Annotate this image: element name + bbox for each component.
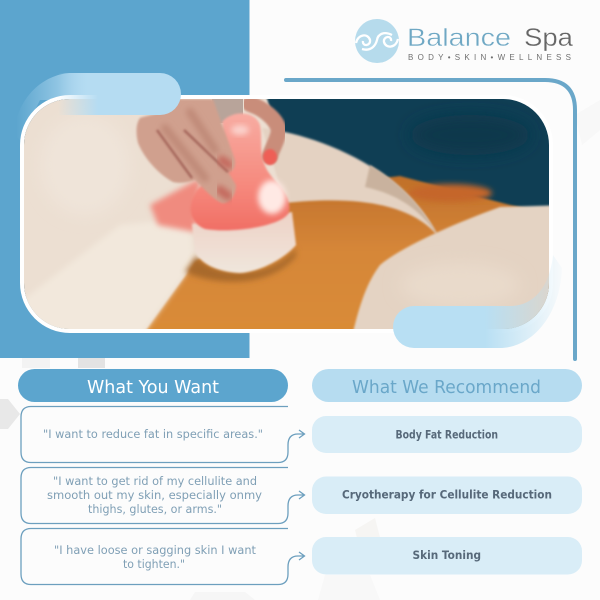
left header: What You Want: What You Want [87,377,219,398]
bottom light blue accent pill [393,255,562,348]
recommendation: Skin Toning: Skin Toning [412,549,481,562]
logo [355,19,573,63]
right towel [352,204,549,329]
request 3 text [54,544,257,571]
belly [145,174,549,329]
request 2 text: thighs, glutes, or arms." [88,503,222,516]
request box 1 with arrow [21,406,304,462]
request 1 text: "I want to reduce fat in specific areas." [43,428,263,441]
hand: fingers mass [137,99,236,203]
request 2 text: "I want to get rid of my cellulite and [53,475,257,488]
left header: What You Want [18,369,288,402]
right header: What We Recommend: What We Recommend [352,377,541,398]
logo wordmark: Balance: Balance [407,24,511,52]
red glow on towel [150,178,200,232]
right frame line [286,80,575,359]
device highlight [258,180,286,214]
device shadow [185,248,296,282]
request box 3 with arrow [21,528,304,584]
recommendation: Skin Toning [312,537,582,574]
logo wordmark: Spa: Spa [524,24,573,52]
photo: body treatment device [24,99,549,329]
hand: finger separators [157,130,228,178]
device white base [192,212,296,273]
recommendation: Cryotherapy for Cellulite Reduction: Cryotherapy for Cellulite Reduction [342,488,552,502]
blue backdrop panel [0,0,250,358]
device metal neck [212,99,243,123]
top light blue accent pill [58,73,181,115]
logo icon: swirl circle [355,19,399,63]
recommendation: Body Fat Reduction [312,416,582,453]
hand: finger shading [165,112,215,178]
request 2 text: smooth out my skin, especially onmy [47,489,262,502]
hand: thumb [250,104,279,156]
recommendation: Cryotherapy for Cellulite Reduction [312,476,582,514]
logo tagline: BODY•SKIN•WELLNESS [408,53,571,62]
device glowing head [191,113,289,230]
request 3 text: to tighten." [123,558,185,571]
right header: What We Recommend [312,369,582,402]
top accent arc behind frame [14,73,100,140]
recommendation: Body Fat Reduction: Body Fat Reduction [396,428,498,442]
hand: fingertips [220,160,229,196]
request 3 text: "I have loose or sagging skin I want [54,544,257,557]
left towel [24,99,282,329]
request 2 text [47,475,262,516]
upper towel band [262,128,438,236]
request box 2 with arrow [21,468,304,524]
photo white frame [20,95,553,333]
